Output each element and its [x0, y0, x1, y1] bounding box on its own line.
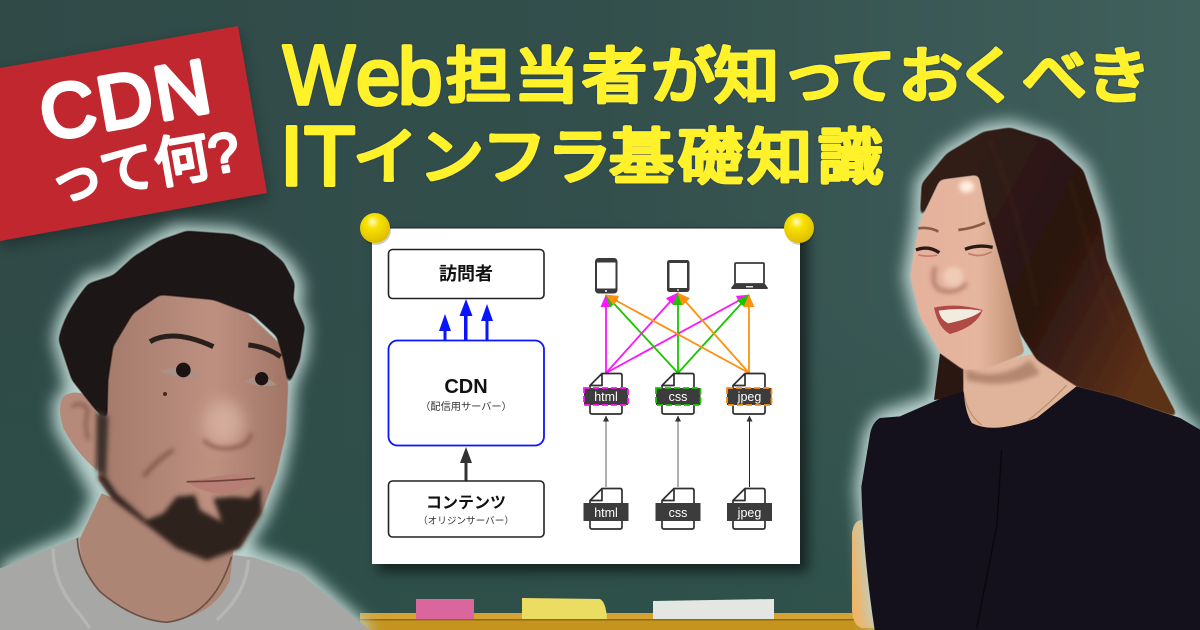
- box: content: コンテンツ: [426, 495, 506, 512]
- title line 2 Japanese: インフラ基礎知識: [353, 109, 883, 196]
- icon: smartphone: [595, 258, 618, 294]
- hair: [58, 231, 305, 420]
- eyebrows: [918, 223, 985, 232]
- neck: [80, 493, 233, 622]
- icon: origin html file: html: [594, 506, 618, 520]
- title: [280, 28, 1151, 203]
- icon: cached html file: html: [594, 390, 618, 404]
- box: visitors: 訪問者: [439, 264, 493, 284]
- glow around woman: [862, 127, 1193, 623]
- mouth: [934, 306, 983, 334]
- face: [910, 175, 1025, 370]
- icon: laptop: [731, 263, 768, 289]
- title Latin: IT: IT: [280, 109, 355, 203]
- arrows: origin files to cached files: [606, 416, 750, 487]
- necklace: [964, 385, 1067, 425]
- eyebrows: [150, 336, 281, 357]
- glow around man: [8, 232, 363, 630]
- icon: cached html file: [584, 374, 628, 414]
- icon: origin jpeg file: [727, 488, 772, 529]
- mouth: [187, 474, 255, 494]
- shirt: [0, 537, 370, 630]
- title line 1 Japanese: 担当者が知っておくべき: [446, 28, 1151, 115]
- woman portrait: [862, 127, 1200, 630]
- icon: origin css file: [656, 488, 700, 529]
- banner text: CDN: CDN: [34, 44, 219, 157]
- beard: [97, 473, 262, 561]
- box: visitors: [388, 250, 544, 298]
- box: CDN: [388, 340, 544, 446]
- box: CDN: CDN: [444, 376, 488, 398]
- arrows: CDN to visitors: [439, 299, 493, 340]
- icon: cached css file: css: [669, 390, 687, 404]
- title Latin: eb: eb: [356, 32, 442, 121]
- icon: tablet: [667, 260, 690, 292]
- title Latin: W: W: [283, 28, 355, 122]
- icon: origin css file: css: [669, 506, 687, 520]
- panel: diagram paper: [372, 228, 808, 572]
- icon: cached jpeg file: jpeg: [737, 390, 761, 404]
- eyes: [916, 246, 993, 253]
- hair strands: [990, 140, 1117, 333]
- box: content: [388, 481, 544, 537]
- forehead highlight: [959, 181, 974, 193]
- shirt collar: [77, 538, 232, 622]
- eyes: [160, 367, 200, 378]
- banner text: って何?: って何?: [44, 120, 244, 214]
- icon: cached css file: [656, 374, 700, 414]
- man portrait: [0, 231, 370, 630]
- icon: origin html file: [584, 488, 628, 529]
- arrow: content to CDN: [460, 447, 472, 481]
- icon: right pin: [784, 213, 815, 245]
- icon: cached jpeg file: [727, 374, 772, 414]
- smile line: [143, 450, 173, 477]
- red banner: CDNって何?: [0, 26, 267, 247]
- dress: [862, 387, 1200, 630]
- nose: [203, 433, 252, 449]
- hair back: [934, 353, 965, 400]
- dress seams: [977, 450, 1002, 628]
- chalk ledge with chalk pieces: [360, 520, 880, 630]
- neck: [963, 353, 1080, 433]
- ear: [60, 392, 100, 470]
- nose and cheek highlight: [203, 400, 243, 447]
- face: [98, 292, 288, 560]
- sideburn: [96, 410, 108, 477]
- box: content: （オリジンサーバー）: [418, 515, 514, 527]
- arrows: files to devices: [606, 293, 749, 373]
- nose: [933, 267, 967, 291]
- mole: [163, 392, 167, 396]
- icon: left pin: [360, 213, 391, 245]
- icon: origin jpeg file: jpeg: [737, 506, 761, 520]
- box: CDN: （配信用サーバー）: [420, 400, 512, 413]
- hair: [920, 127, 1178, 417]
